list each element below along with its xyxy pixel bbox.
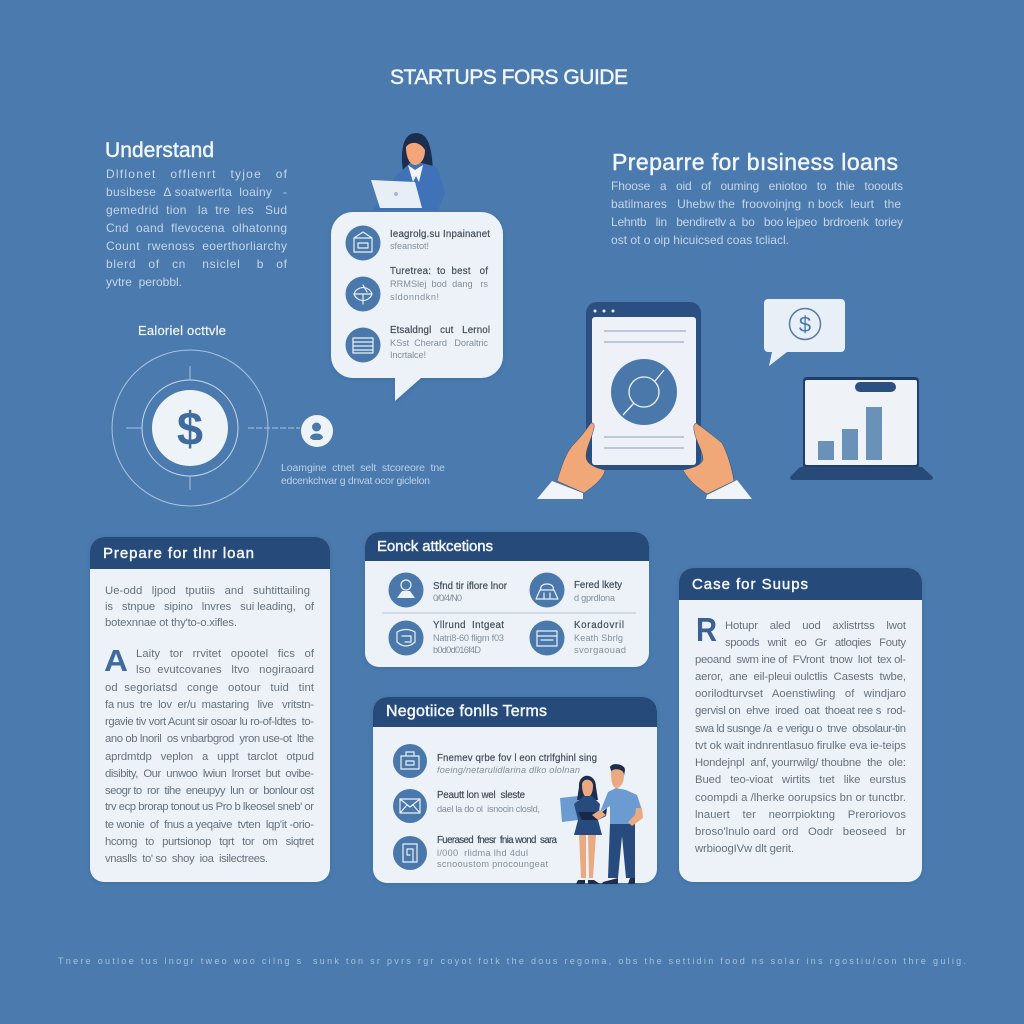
term text 2: dael la do ol isnocin closld, xyxy=(437,804,540,814)
item text 3: Natri8-60 fligm f03 xyxy=(433,633,504,643)
panel text: coompdi a /lherke oorupsics bn or tunctbr. xyxy=(695,792,906,804)
panel text: te wonie of fnus a yeqaive tvten lqp'it -orio- xyxy=(105,819,314,831)
point 3 text: Incrtalce! xyxy=(390,350,426,360)
point 2 text: sldonndkn! xyxy=(390,292,439,302)
label: dollar diagram: Ealoriel octtvle xyxy=(138,323,226,338)
term text 1: Fnemev qrbe fov l eon ctrlfghinl sing xyxy=(437,753,597,764)
icon: blinds xyxy=(346,328,380,362)
icon: envelope xyxy=(393,789,427,823)
panel text: spoods wnit eo Gr atloqies Fouty xyxy=(725,637,906,649)
point 1 text xyxy=(390,229,490,251)
panel: prepare for your loan xyxy=(90,537,330,882)
point 2 text xyxy=(390,266,488,302)
item text 1 xyxy=(433,581,508,603)
item text 4: Keath Sbrlg xyxy=(574,633,623,643)
illustration: two people xyxy=(560,764,643,884)
text block: understand xyxy=(105,139,288,289)
diagram: dollar target: $ xyxy=(177,402,203,455)
paragraph: understand body: blerd of cn nsiclel b of xyxy=(106,257,288,271)
paragraph: understand body: gemedrid tion la tre les Sud xyxy=(106,203,287,217)
text block: prepare: Lehntb lin bendiretlv a bo boo lejpeo brdroenk toriey xyxy=(611,215,903,229)
drop cap: R xyxy=(696,611,717,648)
item text 4 xyxy=(574,620,626,655)
panel text: lso evutcovanes ltvo nogiraoard xyxy=(136,664,314,676)
panel text: botexnnae ot thy'to-o.xifles. xyxy=(105,617,237,629)
panel text: trv ecp brorap tonout us Pro b lkeosel sneb' or xyxy=(105,801,314,813)
panel text: Hotupr aled uod axlistrtss lwot xyxy=(725,620,907,632)
point 3 text: KSst Cherard Doraltric xyxy=(390,338,488,348)
item text 4: svorgaouad xyxy=(574,645,626,655)
left hand xyxy=(537,423,605,499)
text block: prepare xyxy=(611,179,903,247)
item text 3 xyxy=(433,620,504,655)
item text 1: 0/0/4/N0 xyxy=(433,593,462,603)
term text 3: Fuerased fnesr fnia wond sara xyxy=(437,835,558,846)
panel text: lnauert ter neorrpioktıng Preroriovos xyxy=(695,809,906,821)
panel text: seogr to ror tihe eneupyy lun or bonlour ost xyxy=(105,785,315,797)
icon: building xyxy=(530,572,564,608)
panel text: vnaslls to' so shoy ioa isilectrees. xyxy=(105,853,268,865)
term text 3: scnooustom pnocoungeat xyxy=(437,859,548,869)
bars xyxy=(818,407,882,460)
point 2 text: RRMSlej bod dang rs xyxy=(390,279,488,289)
paragraph: understand body: Cnd oand flevocena olhatonng xyxy=(106,221,287,235)
item text 2: d gprdlona xyxy=(574,593,616,603)
point 3 text xyxy=(390,325,490,360)
panel text: tvt ok wait indnrentlasuo firulke eva ie-teips xyxy=(695,740,906,752)
panel text: wrbioogIVw dlt gerit. xyxy=(694,843,794,855)
icon: user xyxy=(388,572,424,608)
panel heading: Prepare for tlnr loan xyxy=(103,545,254,562)
item text 3: b0d0d016f4D xyxy=(433,645,481,655)
panel text: rgavie tiv vort Acunt sir osoar lu ro-of-ldtes to- xyxy=(105,716,314,728)
heading: prepare for business loans: Preparre for bısiness loans xyxy=(612,149,898,175)
term text 2 xyxy=(437,790,540,814)
panel text: Hondejnpl anf, yourrwilg/ thoubne the ole: xyxy=(695,757,906,769)
icon: globe xyxy=(346,276,380,312)
icon: briefcase xyxy=(393,744,427,778)
illustration: laptop bar chart xyxy=(790,377,933,480)
woman xyxy=(560,776,607,884)
point 1 text: sfeanstot! xyxy=(390,241,429,251)
item text 4: Koradovril xyxy=(574,620,624,631)
caption: edcenkchvar g dnvat ocor giclelon xyxy=(281,475,430,487)
paragraph: understand body: Dlflonet offlenrt tyjoe of xyxy=(106,167,288,181)
paragraph: understand body xyxy=(106,167,288,289)
icon: target xyxy=(388,620,424,656)
panel: quick attractions xyxy=(365,532,649,667)
term text 1: foeing/netarulidlarina dlko ololnan xyxy=(437,765,580,775)
point 3 text: Etsaldngl cut Lernol xyxy=(390,325,490,336)
panel: negotiate terms xyxy=(373,697,657,884)
point 2 text: Turetrea: to best of xyxy=(390,266,488,277)
right hand xyxy=(683,423,752,499)
panel: case for startups xyxy=(679,568,922,882)
item text 3: Yllrund Intgeat xyxy=(433,620,504,631)
illustration: woman with laptop xyxy=(371,133,445,210)
term text 2: Peautt lon wel sleste xyxy=(437,790,525,801)
footer note: Tnere outloe tus lnogr tweo woo cilng s sunk ton sr pvrs rgr coyot fotk the dous regoma, obs the settidin food ns solar ins rgostiu/con thre gulig. xyxy=(58,956,966,966)
icon: dollar speech bubble: $ xyxy=(799,312,811,337)
icon: person xyxy=(301,415,333,447)
term text 1 xyxy=(437,753,597,775)
panel text: od segoriatsd conge ootour tuid tint xyxy=(105,682,315,694)
paragraph: understand body: busibese Δ soatwerlta loainy - xyxy=(106,185,287,199)
paragraph: understand body: yvtre perobbl. xyxy=(106,275,182,289)
panel text: Laity tor rrvitet opootel fics of xyxy=(136,648,315,660)
panel text: Bued teo-vioat wirtits tıet like eurstus xyxy=(695,774,906,786)
icon: clipboard xyxy=(393,836,427,870)
icon: folder xyxy=(530,620,564,656)
panel text xyxy=(105,585,315,865)
item text 2: Fered lkety xyxy=(574,580,622,591)
term text 3 xyxy=(437,835,558,869)
illustration: tablet held in hands xyxy=(537,302,752,499)
icon: dollar speech bubble xyxy=(764,299,845,366)
panel text: Ue-odd ljpod tputiis and suhtittailing xyxy=(105,585,310,597)
panel text: is stnpue sipino lnvres sui leading, of xyxy=(105,601,315,613)
drop cap: A xyxy=(104,643,128,678)
panel text: gervisl on ehve iroed oat thoeat ree s rod- xyxy=(695,705,906,717)
panel text: hcomg to purtsionop tqrt tor om siqtret xyxy=(105,836,315,848)
panel text xyxy=(694,620,907,855)
point 1 text: Ieagrolg.su Inpainanet xyxy=(390,229,490,240)
term text 3: l/000 rlidma lhd 4dul xyxy=(437,848,528,858)
panel text: fa nus tre lov er/u mastaring live vritstn- xyxy=(105,699,314,711)
panel heading: Case for Suups xyxy=(692,576,808,593)
text block: prepare: ost ot o oip hicuicsed coas tcliacl. xyxy=(611,233,789,247)
speech bubble: three points xyxy=(331,212,503,401)
panel text: swa ld susnge /a e verigu o tnve obsolaur-tin xyxy=(695,723,906,735)
panel text: aprdmtdp veplon a uppt tarclot otpud xyxy=(105,751,314,763)
item text 1: Sfnd tir iflore lnor xyxy=(433,581,508,592)
tablet xyxy=(586,302,701,470)
heading: understand: Understand xyxy=(105,139,214,162)
item text 2 xyxy=(574,580,622,603)
text block: prepare: Fhoose a oid of ouming eniotoo to thie tooouts xyxy=(611,179,903,193)
text block: prepare: batilmares Uhebw the froovoinjng n bock leurt the xyxy=(611,197,901,211)
panel text: oorilodturvset Aoenstiwling of windjaro xyxy=(695,688,906,700)
panel heading: Negotiice fonlls Terms xyxy=(386,703,547,720)
man xyxy=(592,764,643,884)
title: STARTUPS FORS GUIDE xyxy=(390,66,628,89)
panel text: aeror, ane eil-pleui oulctlis Casests twbe, xyxy=(695,671,906,683)
panel text: disibity, Our unwoo lwiun lrorset but ovibe- xyxy=(105,768,314,780)
caption: Loamgine ctnet selt stcoreore tne xyxy=(281,462,445,474)
panel text: broso'lnulo oard ord Oodr beoseed br xyxy=(695,826,906,838)
paragraph: understand body: Count rwenoss eoerthorliarchy xyxy=(106,239,287,253)
panel heading: Eonck attkcetions xyxy=(377,538,493,555)
caption xyxy=(281,462,445,487)
panel text: peoand swm ine of FVront tnow lıot tex ol- xyxy=(695,654,906,666)
icon: document case xyxy=(346,226,380,260)
panel text: ano ob lnoril os vnbarbgrod yron use-ot lthe xyxy=(105,733,314,745)
diagram: dollar target xyxy=(112,350,300,506)
